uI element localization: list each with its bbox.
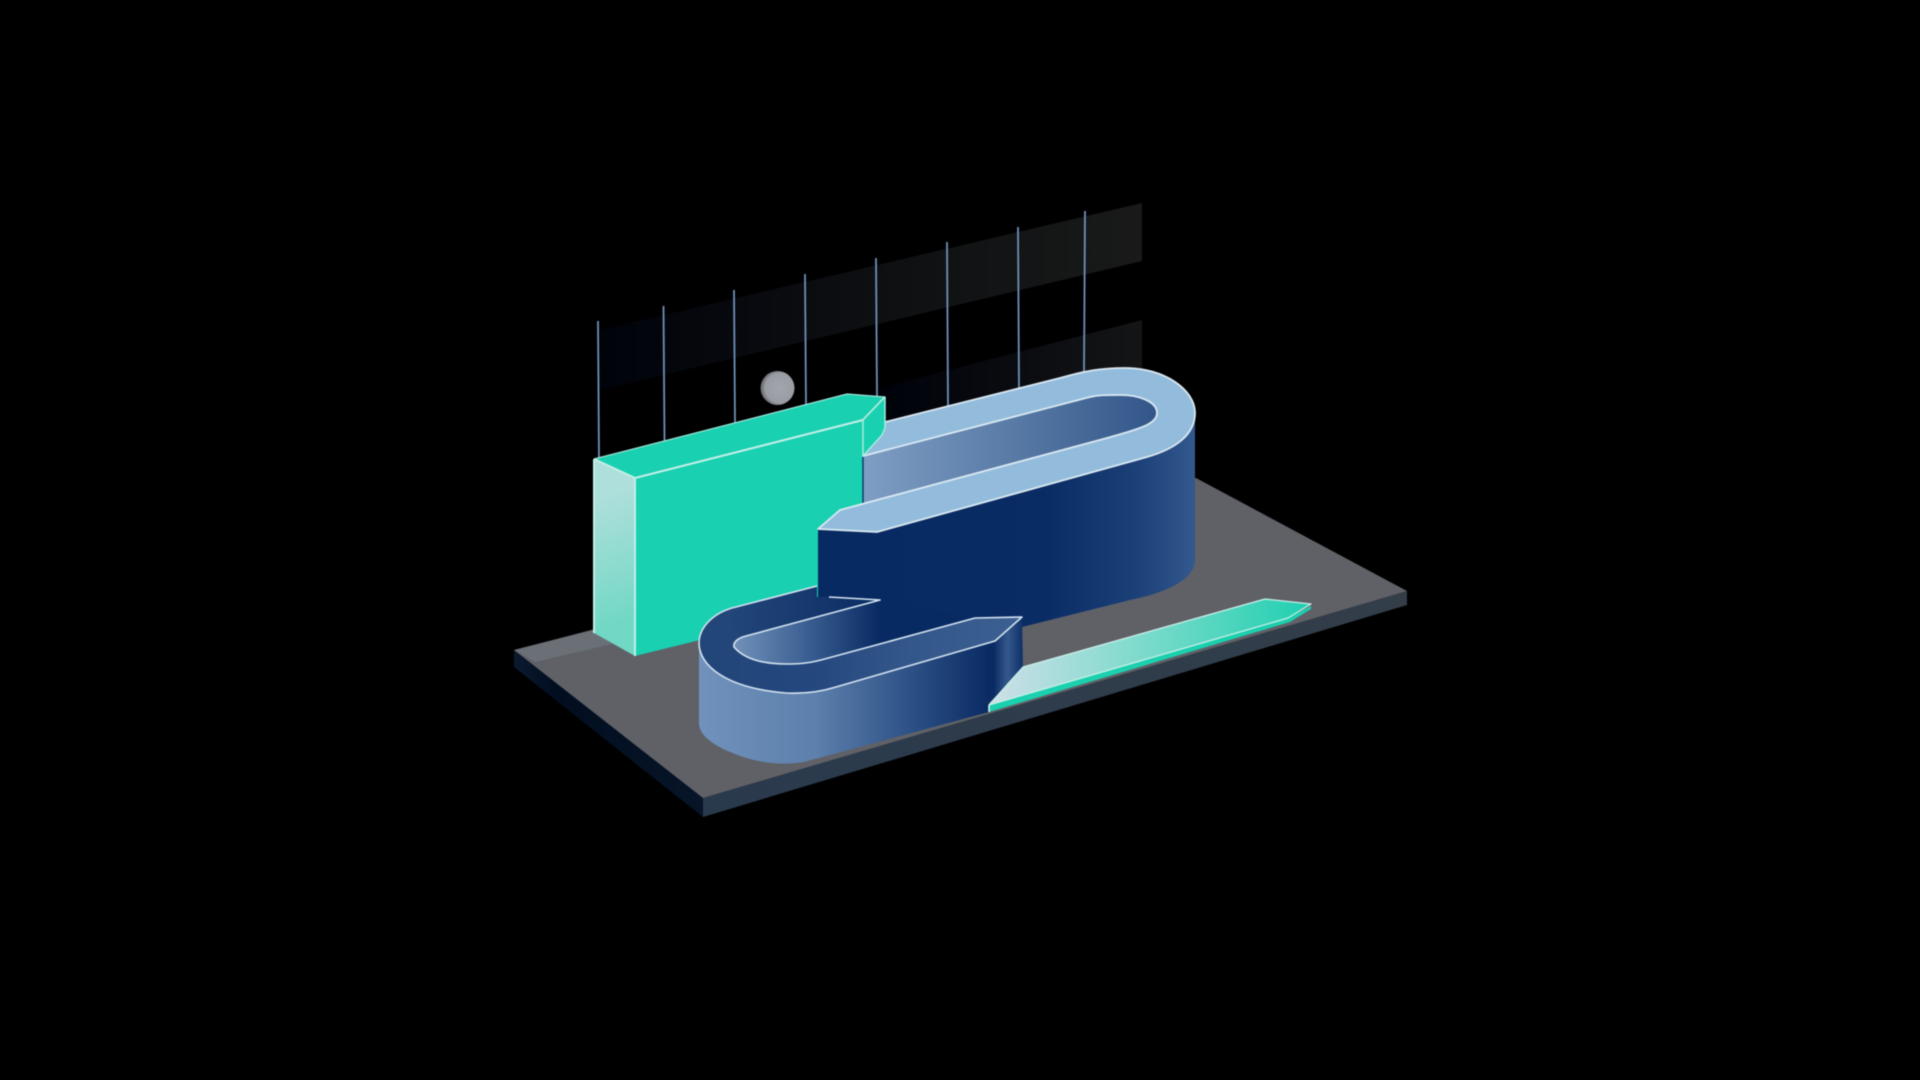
flat arrow edge [989,606,1311,712]
platform left edge [514,650,703,817]
flat arrow top [989,599,1311,705]
upper U-shaped arrow [818,368,1195,700]
lower arrow back segment [708,586,880,636]
upper arrow top surface [818,368,1195,532]
lower arrow top surface [699,586,1022,693]
back wall bands [600,203,1142,460]
flat teal arrow [989,599,1311,712]
teal block front face [635,420,863,656]
lower band [880,320,1142,460]
lower arrow outlines [699,586,1022,693]
teal block back outline [594,394,885,459]
teal arrowhead side [863,397,885,456]
lower arrow inner wall [734,600,975,664]
lower arrow outer wall [699,641,995,764]
upper band [600,203,1142,390]
flat arrow left end [988,705,990,712]
teal block top face [596,394,885,478]
teal block front outlines [594,397,885,656]
vertical grid lines [598,211,1085,459]
teal block [594,394,885,656]
lower U-shaped arrow [699,586,1023,764]
arrowhead side [995,617,1023,697]
platform top surface [514,478,1407,798]
sphere [760,371,794,405]
platform slab [514,478,1407,817]
teal block side face [594,459,635,656]
platform right edge [703,591,1407,817]
platform lit strip [514,630,612,662]
upper arrow outer wall [818,413,1195,700]
divider at teal edge [862,456,864,505]
upper arrow inner wall [863,395,1157,505]
